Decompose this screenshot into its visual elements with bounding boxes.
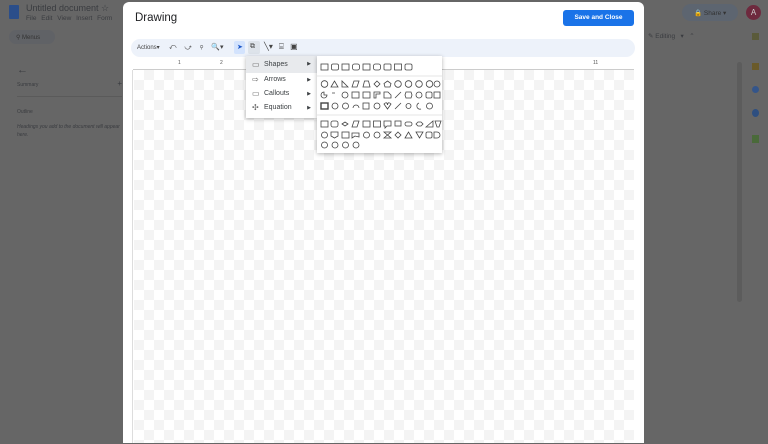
search menus pill: ⚲ Menus <box>16 35 40 41</box>
shape menu: ▶ <box>307 105 311 111</box>
search menus pill <box>9 30 55 44</box>
shape menu: ▭ <box>252 60 260 69</box>
editing mode: ✎ Editing ▾ ⌃ <box>648 33 695 40</box>
document title: Untitled document ☆ <box>26 3 109 13</box>
left ruler <box>123 70 133 443</box>
save and close button <box>563 10 634 26</box>
toolbar: ➤ <box>237 44 243 51</box>
top ruler: 2 <box>220 60 223 66</box>
shape menu: Shapes <box>264 61 288 68</box>
shape menu: Arrows <box>264 76 286 83</box>
shapes submenu <box>317 56 442 153</box>
summary sidebar <box>17 64 122 138</box>
summary sidebar: + <box>117 79 122 88</box>
dialog title: Drawing <box>135 12 177 24</box>
shape menu: ▶ <box>307 77 311 83</box>
summary sidebar: Outline <box>17 109 33 115</box>
shape menu: ⇨ <box>252 75 259 84</box>
drawing dialog <box>123 2 644 443</box>
shape menu: Callouts <box>264 90 289 97</box>
share button <box>682 4 738 21</box>
avatar <box>746 5 761 20</box>
shape menu <box>246 56 317 118</box>
share button: 🔒 Share ▾ <box>694 10 726 17</box>
save and close button: Save and Close <box>574 14 623 21</box>
shape menu: Equation <box>264 104 292 111</box>
shape menu: ✣ <box>252 103 259 112</box>
shape menu: ▶ <box>307 61 311 67</box>
top ruler <box>133 60 634 70</box>
docs menu bar: File Edit View Insert Form <box>26 15 112 22</box>
icon: docs logo <box>9 5 19 19</box>
summary sidebar: ← <box>17 64 28 76</box>
toolbar: ⤺ ⤻ ⚲ 🔍▾ <box>169 44 224 51</box>
summary sidebar: Summary <box>17 82 38 88</box>
side app icons <box>752 33 759 40</box>
avatar: A <box>751 8 756 17</box>
shape menu: ▶ <box>307 91 311 97</box>
top ruler: 11 <box>593 60 598 66</box>
toolbar: Actions▾ <box>137 45 160 51</box>
toolbar: ⧉ <box>250 43 255 50</box>
summary sidebar: Headings you add to the document will appear here. <box>17 124 120 138</box>
toolbar <box>131 39 635 57</box>
top ruler: 1 <box>178 60 181 66</box>
shape menu: ▭ <box>252 89 260 98</box>
canvas <box>134 70 634 443</box>
select and shape tools <box>234 41 245 54</box>
toolbar: ╲▾ ⌸ ▣ <box>264 42 298 51</box>
